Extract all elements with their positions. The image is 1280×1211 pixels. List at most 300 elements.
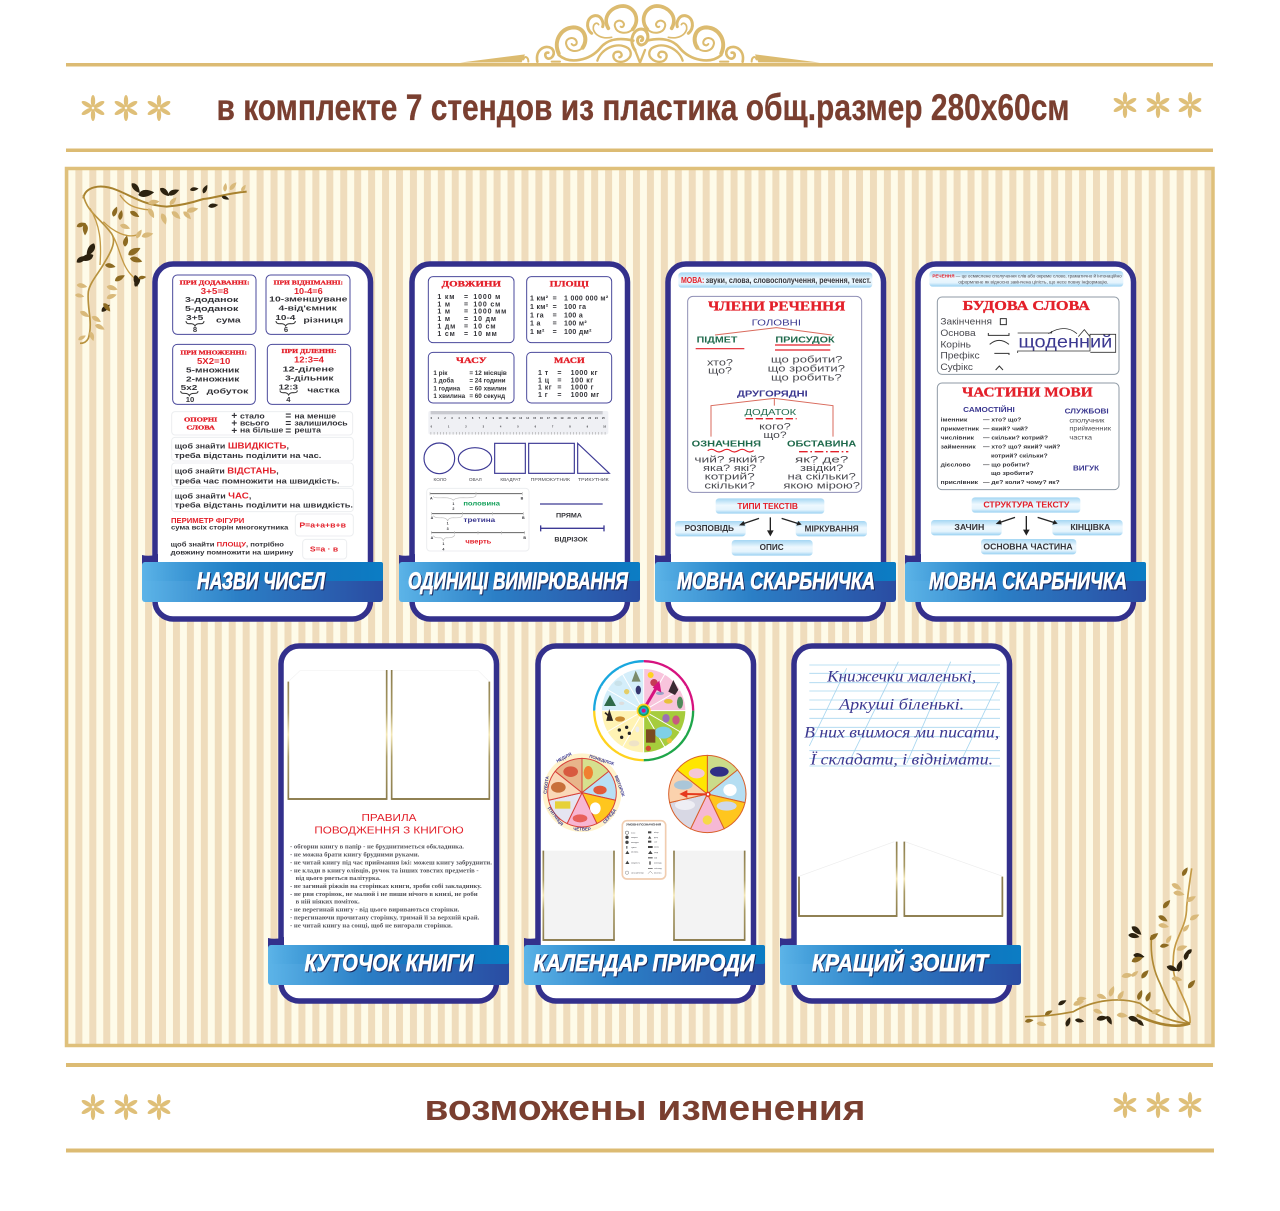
mass table: 1000 г bbox=[571, 385, 594, 392]
sentence members box: ОЗНАЧЕННЯ bbox=[692, 440, 761, 449]
key words box: решта bbox=[294, 428, 321, 435]
floral: top left corner bbox=[75, 181, 247, 343]
time table: ЧАСУ bbox=[456, 356, 487, 365]
parts of speech box: прикметник bbox=[941, 426, 979, 432]
ruler: 8 bbox=[569, 424, 571, 428]
division box: 12:3 bbox=[279, 382, 298, 391]
ribbon: КУТОЧОК КНИГИ bbox=[304, 950, 474, 977]
parts of speech box: дієслово bbox=[941, 462, 971, 468]
time rule: треба відстань поділити на швидкість. bbox=[175, 500, 353, 509]
fractions box: В bbox=[522, 516, 525, 520]
weather symbols card: дощ bbox=[654, 837, 658, 839]
week wheel: СЕРЕДА bbox=[602, 807, 618, 825]
ruler: 20 bbox=[568, 416, 571, 420]
fractions box: А bbox=[431, 536, 434, 540]
sentence members box: що зробити? bbox=[768, 363, 845, 373]
language strip: МОВА: bbox=[681, 276, 704, 285]
area table bbox=[527, 277, 612, 343]
weather symbols card: ясно bbox=[631, 832, 636, 834]
fractions box: чверть bbox=[465, 539, 491, 546]
rules list: в ній ніяких поміток. bbox=[296, 898, 360, 905]
week wheel: ВІВТОРОК bbox=[614, 775, 626, 797]
word structure box: Суфікс bbox=[940, 362, 973, 372]
mass table: 1000 кг bbox=[571, 370, 598, 377]
division box: ПРИ ДІЛЕННІ: bbox=[281, 348, 336, 355]
straight line and segment: ВІДРІЗОК bbox=[554, 537, 588, 544]
perimeter: Р=а+а+в+в bbox=[299, 521, 347, 530]
sentence definition strip: оформлене як відносно закінчена цілість, що несе повну інформацію. bbox=[958, 279, 1108, 284]
mass table: = bbox=[557, 377, 562, 384]
weather wheel bbox=[669, 755, 746, 833]
addition box: 3+5=8 bbox=[201, 287, 229, 296]
fractions box: А bbox=[431, 516, 434, 520]
ruler: 12 bbox=[513, 416, 516, 420]
area table: 100 м² bbox=[564, 321, 587, 328]
ruler: 3 bbox=[483, 424, 485, 428]
length table: = bbox=[464, 316, 469, 323]
area table: 100 дм² bbox=[564, 329, 592, 336]
ruler: 7 bbox=[552, 424, 554, 428]
area table: 1 000 000 м² bbox=[564, 296, 609, 303]
mass table bbox=[527, 352, 612, 403]
distance rule bbox=[172, 463, 353, 487]
fractions box: А bbox=[430, 496, 433, 500]
time table: = 12 місяців bbox=[469, 369, 507, 377]
mass table: 1 кг bbox=[538, 385, 552, 392]
time table: = 60 хвилин bbox=[469, 385, 507, 392]
ruler: 25 bbox=[602, 416, 605, 420]
weather symbols card: УМОВНІ ПОЗНАЧЕННЯ bbox=[626, 823, 662, 826]
area: довжину помножити на ширину bbox=[171, 550, 294, 557]
ruler: 3 bbox=[451, 416, 453, 420]
week wheel: СУБОТА bbox=[542, 775, 550, 794]
poem: Ї складати, і віднімати. bbox=[809, 751, 993, 768]
area table: 1 га bbox=[530, 312, 544, 319]
rules list: від цього рветься палітурка. bbox=[296, 876, 381, 882]
fractions box: 4 bbox=[442, 547, 445, 551]
ruler: 22 bbox=[581, 416, 585, 420]
length table: 10 мм bbox=[473, 331, 498, 338]
key words box bbox=[172, 411, 353, 437]
weather symbols card: похмуро bbox=[631, 842, 640, 844]
sentence members box: що? bbox=[708, 366, 732, 376]
length table: = bbox=[464, 331, 469, 338]
stand 1 content bbox=[171, 275, 353, 559]
length table: = bbox=[464, 323, 469, 330]
mass table: 1 г bbox=[538, 392, 548, 399]
time table: = 60 секунд bbox=[469, 393, 505, 400]
stand 2: units of measurement bbox=[399, 264, 640, 619]
stand 6: nature calendar bbox=[524, 646, 765, 1001]
division box bbox=[267, 344, 351, 404]
length table: = bbox=[464, 294, 469, 301]
top rule bbox=[66, 63, 1213, 66]
word structure box: Закінчення bbox=[940, 317, 992, 327]
sentence members box: ПРИСУДОК bbox=[775, 335, 835, 344]
area bbox=[171, 539, 347, 559]
rules list: - не можна брати книгу брудними руками. bbox=[290, 851, 420, 858]
length table: 1 км bbox=[437, 294, 455, 301]
sentence members box: котрий? bbox=[705, 472, 755, 482]
multiplication box: ПРИ МНОЖЕННІ: bbox=[180, 349, 247, 356]
length table: ДОВЖИНИ bbox=[442, 280, 502, 289]
ribbon: МОВНА СКАРБНИЧКА bbox=[677, 568, 875, 595]
parts of speech box: займенник bbox=[941, 443, 976, 450]
weather symbols card: хмарно bbox=[631, 837, 639, 839]
stand 5: book corner bbox=[268, 646, 509, 1001]
sentence members box: ОБСТАВИНА bbox=[787, 440, 857, 449]
rules heading bbox=[314, 813, 464, 837]
time table bbox=[428, 352, 514, 403]
parts of speech box: — який? чий? bbox=[983, 425, 1029, 432]
sentence members box: як? де? bbox=[795, 454, 848, 464]
fractions box: 1 bbox=[447, 521, 449, 525]
length table: 10 дм bbox=[473, 316, 497, 323]
stars: top left bbox=[81, 95, 171, 121]
addition box: 8 bbox=[193, 325, 198, 334]
rules list: - не читай книгу під час приймання їжі: можеш книгу забруднити. bbox=[290, 859, 493, 866]
weather symbols card: сніг bbox=[654, 841, 658, 844]
left pocket bbox=[543, 851, 615, 940]
mass table: 1000 мг bbox=[571, 392, 600, 399]
sentence members box: кого? bbox=[759, 421, 791, 431]
area table: = bbox=[553, 329, 557, 336]
key words box: = bbox=[285, 411, 291, 422]
subtraction box: 10-4 bbox=[275, 313, 296, 322]
weather symbols card: град bbox=[654, 852, 659, 854]
addition box: сума bbox=[216, 315, 242, 324]
key words box: + bbox=[231, 411, 237, 422]
subtraction box: 10-зменшуване bbox=[269, 295, 347, 304]
area table: ПЛОЩІ bbox=[550, 280, 589, 289]
subtraction box: ПРИ ВІДНІМАННІ: bbox=[274, 279, 343, 286]
stars: top right bbox=[1113, 92, 1202, 118]
weather symbols card: веселка bbox=[654, 873, 662, 875]
parts of speech box: що зробити? bbox=[991, 470, 1034, 477]
sentence definition strip: РЕЧЕННЯ — це осмислене сполучення слів або окреме слово, граматично й інтонаційно bbox=[932, 273, 1122, 278]
division box: 12:3=4 bbox=[294, 355, 325, 364]
length table: 1000 м bbox=[473, 294, 501, 301]
language strip: звуки, слова, словосполучення, речення, текст. bbox=[706, 276, 871, 285]
poem: Книжечки маленькі, bbox=[826, 669, 976, 686]
key words box: = bbox=[285, 426, 291, 437]
poem bbox=[804, 669, 999, 768]
subtraction box: 4-від'ємник bbox=[278, 303, 337, 312]
area: щоб знайти ПЛОЩУ, потрібно bbox=[171, 540, 284, 548]
parts of speech box: котрий? скільки? bbox=[991, 452, 1048, 459]
mass table: 100 кг bbox=[571, 377, 594, 384]
straight line and segment: ПРЯМА bbox=[556, 513, 582, 520]
ruler: 9 bbox=[493, 416, 495, 420]
weather symbols card: туман bbox=[631, 847, 636, 849]
ribbon: ОДИНИЦІ ВИМІРЮВАННЯ bbox=[408, 568, 628, 595]
perimeter: сума всіх сторін многокутника bbox=[171, 524, 289, 532]
ruler: 1 bbox=[438, 416, 440, 420]
shape labels: ТРИКУТНИК bbox=[578, 477, 609, 482]
text structure diagram: ЗАЧИН bbox=[954, 523, 985, 532]
addition box: 3+5 bbox=[186, 313, 204, 322]
text types diagram: ОПИС bbox=[760, 543, 784, 552]
speed rule: треба відстань поділити на час. bbox=[175, 451, 321, 460]
parts of speech box bbox=[937, 383, 1119, 490]
ribbon bbox=[905, 554, 1146, 602]
length table: = bbox=[464, 309, 469, 316]
multiplication box: 2-множник bbox=[186, 374, 240, 383]
multiplication box: 10 bbox=[186, 395, 194, 404]
time table: 1 година bbox=[433, 385, 461, 392]
shape labels: ПРЯМОКУТНИК bbox=[531, 477, 570, 482]
length table bbox=[428, 277, 514, 343]
area table: 100 а bbox=[564, 312, 583, 319]
sentence members box: звідки? bbox=[800, 463, 843, 473]
notebook pockets bbox=[798, 842, 1003, 916]
stars: bottom right bbox=[1113, 1092, 1202, 1118]
week wheel: П'ЯТНИЦЯ bbox=[547, 806, 564, 827]
parts of speech box: СЛУЖБОВІ bbox=[1065, 408, 1109, 415]
sentence members box: на скільки? bbox=[787, 472, 856, 482]
text structure diagram: СТРУКТУРА ТЕКСТУ bbox=[983, 501, 1070, 510]
ruler: 14 bbox=[526, 416, 530, 420]
parts of speech box: — хто? що? bbox=[983, 418, 1022, 424]
parts of speech box: — де? коли? чому? як? bbox=[983, 480, 1060, 486]
ruler: 6 bbox=[535, 424, 537, 428]
division box: 4 bbox=[286, 395, 291, 404]
language strip bbox=[678, 272, 872, 288]
stars: bottom left bbox=[81, 1094, 171, 1120]
mass table: 1 т bbox=[538, 370, 549, 377]
footer note: возможены изменения bbox=[424, 1087, 866, 1128]
area table: 100 га bbox=[564, 304, 586, 311]
parts of speech box: числівник bbox=[941, 435, 974, 441]
ruler: 24 bbox=[595, 416, 598, 420]
fractions box: В bbox=[523, 536, 526, 540]
multiplication box: добуток bbox=[207, 386, 249, 395]
ribbon: КРАЩИЙ ЗОШИТ bbox=[812, 948, 990, 977]
ruler: 11 bbox=[506, 416, 509, 420]
length table: 1000 мм bbox=[473, 309, 507, 316]
ribbon: КАЛЕНДАР ПРИРОДИ bbox=[534, 950, 755, 977]
sentence members box: ПІДМЕТ bbox=[697, 335, 737, 344]
parts of speech box: прислівник bbox=[941, 480, 978, 486]
ornament: top crown bbox=[460, 6, 820, 63]
multiplication box: 5-множник bbox=[186, 366, 240, 375]
ruler: 0 bbox=[431, 416, 433, 420]
perimeter bbox=[171, 514, 353, 536]
heading: в комплекте 7 стендов из пластика общ.размер 280х60см bbox=[216, 87, 1070, 128]
sentence members box: чий? який? bbox=[694, 454, 765, 464]
text types diagram: МІРКУВАННЯ bbox=[805, 525, 859, 534]
rules list: - не рви сторінок, не малюй і не пиши нічого в книзі, не роби bbox=[290, 891, 478, 898]
multiplication box bbox=[173, 344, 255, 404]
parts of speech box: ВИГУК bbox=[1073, 466, 1100, 473]
perimeter: ПЕРИМЕТР ФІГУРИ bbox=[171, 516, 244, 525]
area table: = bbox=[553, 312, 557, 319]
copybook lines bbox=[809, 662, 1000, 766]
division box: частка bbox=[307, 385, 341, 394]
length table: 1 м bbox=[437, 316, 451, 323]
stand 1: number names bbox=[142, 264, 383, 619]
fractions box: третина bbox=[463, 517, 496, 524]
sentence members box: скільки? bbox=[704, 480, 755, 490]
parts of speech box: — скільки? котрий? bbox=[983, 434, 1049, 441]
area: S=а · в bbox=[310, 545, 339, 554]
time rule bbox=[172, 488, 353, 512]
key words box: залишилось bbox=[294, 420, 348, 427]
ruler: 15 bbox=[533, 416, 537, 420]
ruler: 19 bbox=[561, 416, 564, 420]
area table: = bbox=[553, 304, 557, 311]
weather symbols card: гроза bbox=[654, 847, 660, 849]
stand 4: language treasury, word structure bbox=[905, 264, 1146, 619]
stand 5 content bbox=[288, 670, 493, 929]
mass table: = bbox=[557, 370, 562, 377]
ruler: 1 bbox=[448, 424, 450, 428]
wheel hand bbox=[644, 687, 657, 708]
ruler: 9 bbox=[587, 424, 589, 428]
ruler: 4 bbox=[500, 424, 502, 428]
stand 4 content bbox=[929, 271, 1123, 554]
rules list: - не читай книгу на сонці, щоб не вигорали сторінки. bbox=[290, 922, 453, 929]
subtraction box: різниця bbox=[303, 315, 343, 324]
rule under heading bbox=[66, 148, 1213, 152]
text structure diagram: ОСНОВНА ЧАСТИНА bbox=[983, 543, 1073, 552]
length table: 1 м bbox=[437, 309, 451, 316]
bottom rule upper bbox=[66, 1063, 1213, 1067]
word structure box: Корінь bbox=[940, 339, 971, 349]
document pockets bbox=[288, 670, 489, 799]
ruler: 23 bbox=[588, 416, 592, 420]
area table: 1 км² bbox=[530, 296, 549, 303]
mass table: = bbox=[557, 392, 562, 399]
parts of speech box: — хто? що? який? чий? bbox=[983, 443, 1061, 450]
weather symbols card: іній bbox=[654, 856, 657, 859]
word structure box bbox=[937, 297, 1119, 374]
division box: 12-ділене bbox=[282, 364, 334, 373]
area table: 1 км² bbox=[530, 304, 549, 311]
mass table: МАСИ bbox=[554, 356, 586, 365]
ruler: 4 bbox=[458, 416, 460, 420]
ribbon bbox=[268, 937, 509, 985]
distance rule: щоб знайти ВІДСТАНЬ , bbox=[175, 466, 279, 476]
mass table: = bbox=[557, 385, 562, 392]
multiplication box: 5Х2=10 bbox=[197, 357, 231, 366]
time table: 1 хвилина bbox=[433, 393, 466, 400]
striped backdrop frame bbox=[66, 168, 1213, 1046]
length table: 100 см bbox=[473, 301, 501, 308]
weather symbols card: ожеледь bbox=[654, 863, 662, 865]
length table: 1 м bbox=[437, 301, 451, 308]
parts of speech box: — що робити? bbox=[983, 461, 1030, 468]
multiplication box: 5х2 bbox=[181, 383, 197, 392]
area table: 1 а bbox=[530, 321, 541, 328]
ruler: 17 bbox=[547, 416, 550, 420]
straight line and segment bbox=[540, 504, 604, 544]
division box: 3-дільник bbox=[285, 373, 334, 382]
stand 3: language treasury, parts of sentence bbox=[655, 264, 896, 619]
ruler: 16 bbox=[540, 416, 543, 420]
shape labels bbox=[434, 477, 609, 482]
weather symbols card: хмарність bbox=[631, 861, 640, 864]
key words box: на менше bbox=[294, 413, 336, 420]
sentence definition strip bbox=[929, 271, 1123, 287]
addition box: ПРИ ДОДАВАННІ: bbox=[180, 279, 250, 286]
distance rule: треба час помножити на швидкість. bbox=[175, 476, 340, 485]
area table: 1 м² bbox=[530, 329, 545, 336]
stand 7 content bbox=[798, 662, 1003, 916]
word structure box: БУДОВА СЛОВА bbox=[963, 298, 1090, 313]
week wheel bbox=[542, 751, 626, 832]
fractions box: 3 bbox=[447, 527, 449, 531]
subtraction box: 6 bbox=[284, 325, 288, 334]
word structure box: Префікс bbox=[940, 351, 980, 361]
length table: 10 см bbox=[473, 323, 496, 330]
poem: В них вчимося ми писати, bbox=[804, 724, 999, 741]
ruler: 2 bbox=[444, 416, 446, 420]
ruler: 8 bbox=[486, 416, 488, 420]
sentence members box: що? bbox=[763, 430, 787, 440]
ruler: 2 bbox=[465, 424, 467, 428]
ribbon bbox=[780, 937, 1021, 985]
shape labels: ОВАЛ bbox=[469, 477, 482, 482]
area table: = bbox=[553, 321, 557, 328]
key words box: = bbox=[285, 418, 291, 429]
week wheel: ЧЕТВЕР bbox=[573, 826, 591, 831]
word structure box: щоденний bbox=[1018, 331, 1112, 351]
weather symbols card bbox=[622, 821, 666, 879]
sentence members box: що робить? bbox=[771, 372, 842, 382]
sentence members box: якою мірою? bbox=[783, 480, 860, 490]
stand 7: best notebook bbox=[780, 646, 1021, 1001]
stand 2 content bbox=[424, 277, 612, 551]
addition box: 3-доданок bbox=[185, 295, 239, 304]
time table: = 24 години bbox=[469, 378, 506, 385]
ruler: 6 bbox=[472, 416, 474, 420]
fractions box: половина bbox=[463, 500, 500, 507]
text structure diagram: КІНЦІВКА bbox=[1070, 523, 1111, 532]
geometric shapes bbox=[424, 443, 609, 474]
speed rule: щоб знайти ШВИДКІСТЬ , bbox=[175, 441, 289, 451]
seasons wheel bbox=[593, 660, 694, 761]
ruler bbox=[428, 411, 608, 434]
text types diagram: РОЗПОВІДЬ bbox=[685, 524, 734, 533]
time rule: щоб знайти ЧАС, bbox=[175, 490, 251, 500]
ruler: 10 bbox=[603, 424, 607, 428]
ribbon bbox=[524, 937, 765, 985]
stand 3 content bbox=[675, 272, 872, 556]
parts of speech box: прийменник bbox=[1069, 426, 1111, 433]
sentence members box: ДРУГОРЯДНІ bbox=[737, 389, 808, 399]
fractions box bbox=[427, 488, 529, 551]
weather symbols card: вітер bbox=[654, 831, 659, 834]
sentence members box: ДОДАТОК bbox=[744, 407, 796, 417]
length table: = bbox=[464, 301, 469, 308]
week wheel: ПОНЕДІЛОК bbox=[589, 754, 615, 766]
sentence members box: хто? bbox=[707, 357, 733, 367]
parts of speech box: ЧАСТИНИ МОВИ bbox=[962, 384, 1093, 399]
fractions box: 1 bbox=[452, 502, 454, 506]
rules list: - не загинай ріжків на сторінках книги, зроби собі закладинку. bbox=[290, 883, 482, 890]
weather symbols card: мінлива bbox=[631, 851, 639, 854]
fractions box: 2 bbox=[452, 507, 454, 511]
weather symbols card: снігопад bbox=[654, 867, 662, 870]
key words box: стало bbox=[240, 413, 265, 420]
sentence members box: ЧЛЕНИ РЕЧЕННЯ bbox=[708, 299, 846, 314]
sentence members box: що робити? bbox=[771, 354, 842, 364]
sentence members box: яка? які? bbox=[703, 463, 756, 473]
stand 6 content bbox=[542, 660, 746, 940]
text structure diagram bbox=[931, 497, 1123, 554]
subtraction box: 10-4=6 bbox=[294, 287, 323, 296]
